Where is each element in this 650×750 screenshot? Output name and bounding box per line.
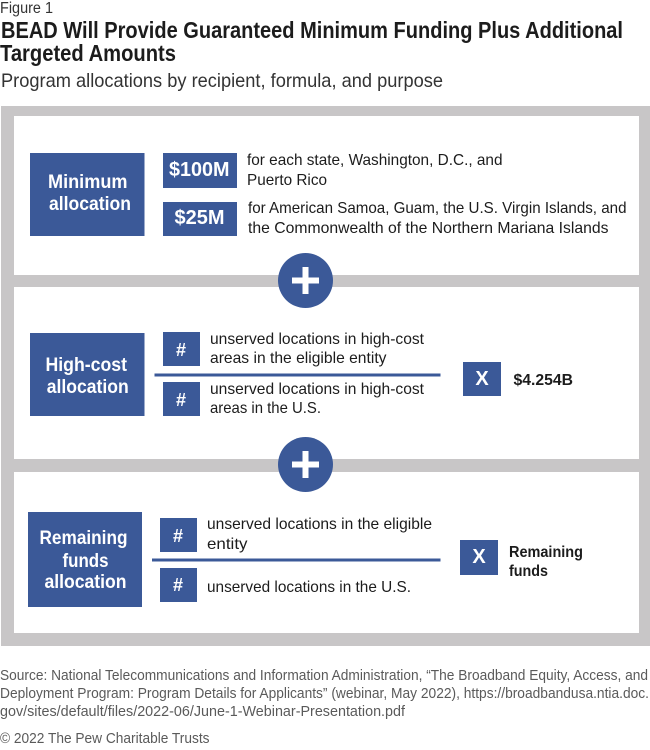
$25M description: the Commonwealth of the Northern Mariana Islands	[248, 220, 608, 237]
source note	[0, 668, 649, 720]
grey frame	[1, 106, 650, 646]
numerator text: unserved locations in high-cost	[210, 331, 425, 348]
multiply badge	[463, 362, 501, 396]
$25M badge	[163, 202, 237, 236]
fraction line	[152, 558, 440, 562]
$100M description	[247, 152, 502, 189]
denominator badge: #	[176, 390, 186, 410]
minimum allocation label: allocation	[49, 194, 131, 215]
$25M description	[248, 200, 626, 237]
remaining funds amount: Remaining	[509, 544, 583, 561]
remaining funds allocation label: allocation	[44, 572, 126, 593]
remaining funds allocation label: Remaining	[40, 528, 128, 549]
title	[0, 17, 623, 66]
denominator text: unserved locations in the U.S.	[207, 579, 411, 596]
$100M badge: $100M	[169, 158, 230, 181]
remaining funds allocation label: funds	[62, 551, 108, 572]
figure label: Figure 1	[0, 0, 53, 17]
denominator text: areas in the U.S.	[210, 400, 321, 417]
minimum allocation label	[30, 153, 144, 236]
numerator text: unserved locations in the eligible	[207, 516, 432, 533]
multiply badge	[460, 540, 498, 575]
copyright: © 2022 The Pew Charitable Trusts	[0, 731, 210, 747]
panel: high-cost allocation	[14, 287, 639, 459]
multiply badge: X	[475, 368, 489, 390]
source note: gov/sites/default/files/2022-06/June-1-Webinar-Presentation.pdf	[0, 704, 406, 720]
numerator text	[210, 331, 425, 367]
multiply badge: X	[472, 546, 486, 568]
high-cost allocation label	[30, 333, 144, 416]
$25M badge: $25M	[174, 206, 224, 229]
panel: remaining funds allocation	[14, 472, 639, 633]
panel: minimum allocation	[14, 116, 639, 275]
high-cost allocation label: High-cost	[46, 355, 128, 376]
denominator text	[210, 381, 425, 417]
high-cost allocation label: allocation	[47, 377, 129, 398]
$100M badge	[163, 153, 237, 188]
numerator badge: #	[176, 340, 186, 360]
numerator badge	[160, 518, 197, 552]
remaining funds amount: funds	[509, 563, 548, 580]
numerator text: entity	[207, 536, 248, 553]
minimum allocation label: Minimum	[48, 172, 128, 193]
subtitle: Program allocations by recipient, formula, and purpose	[1, 70, 443, 92]
icon: plus 2	[278, 437, 333, 492]
remaining funds amount	[509, 544, 583, 580]
denominator badge	[163, 382, 200, 416]
$100M description: for each state, Washington, D.C., and	[247, 152, 502, 169]
numerator text	[207, 516, 432, 553]
fraction line	[154, 374, 440, 376]
numerator badge: #	[173, 526, 183, 546]
icon: plus 1	[278, 253, 333, 308]
denominator badge	[160, 568, 197, 602]
title: Targeted Amounts	[0, 40, 176, 66]
remaining funds allocation label	[28, 512, 142, 607]
$4.254B amount: $4.254B	[514, 372, 573, 389]
numerator text: areas in the eligible entity	[210, 350, 386, 367]
$25M description: for American Samoa, Guam, the U.S. Virgin Islands, and	[248, 200, 626, 217]
numerator badge	[163, 332, 200, 366]
denominator text: unserved locations in high-cost	[210, 381, 425, 398]
denominator badge: #	[173, 575, 183, 595]
$100M description: Puerto Rico	[247, 172, 327, 189]
